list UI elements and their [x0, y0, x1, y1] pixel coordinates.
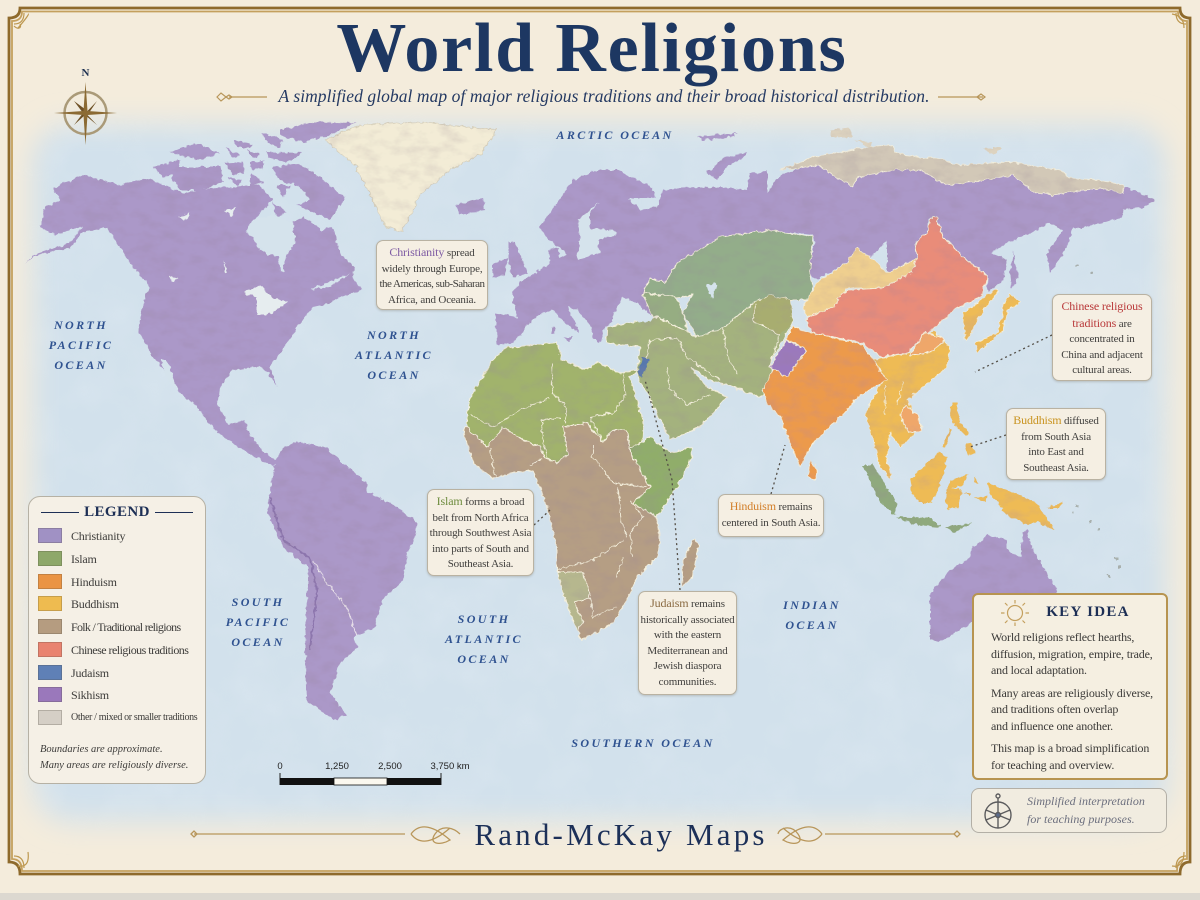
title: World Religions [336, 10, 848, 87]
scale bar [280, 773, 442, 786]
scale label 2,500: 2,500 [378, 761, 402, 772]
legend swatch: Chinese [38, 642, 62, 657]
region: Folk and traditional [463, 423, 699, 640]
legend swatch: Judaism [38, 665, 62, 680]
region: Judaism [638, 358, 650, 378]
legend note: Many areas are religiously diverse. [40, 760, 188, 771]
callout: Islam: through Southwest Asia [430, 527, 531, 539]
panel: teaching note [971, 788, 1167, 833]
key idea heading: KEY IDEA [1046, 604, 1130, 620]
callout: Islam: Southeast Asia. [448, 558, 513, 570]
legend swatch: Christianity [38, 528, 62, 543]
icon: sun [1001, 600, 1029, 626]
ocean label: North Atlantic: ATLANTIC [355, 348, 433, 362]
callout: Christianity: the Americas, sub-Saharan [379, 278, 485, 290]
ocean label: North Pacific: NORTH [54, 318, 108, 332]
callout: Judaism: Judaism remains [650, 596, 725, 610]
ocean label: Arctic: ARCTIC OCEAN [556, 128, 674, 142]
ocean label: North Pacific: PACIFIC [49, 338, 113, 352]
scale label 1,250: 1,250 [325, 761, 349, 772]
Andes and borders on South America [270, 497, 317, 650]
legend note [40, 744, 188, 771]
legend label: Buddhism: Buddhism [71, 597, 119, 611]
legend label: Folk: Folk / Traditional religions [71, 620, 180, 634]
ocean label: Southern: SOUTHERN OCEAN [571, 736, 715, 750]
ocean label: Indian [783, 598, 841, 632]
Australia [930, 530, 1060, 642]
ocean label: North Atlantic: NORTH [367, 328, 421, 342]
legend swatch: Buddhism [38, 596, 62, 611]
subtitle: A simplified global map of major religious traditions and their broad historical distribution. [278, 86, 930, 106]
teaching note text: Simplified interpretation [1027, 794, 1145, 808]
lakes and inland seas [160, 202, 717, 390]
legend swatch: Sikhism [38, 687, 62, 702]
ocean label: South Pacific [226, 595, 290, 649]
legend note: Boundaries are approximate. [40, 744, 163, 755]
callout: Buddhism: into East and [1028, 446, 1084, 458]
legend swatch: Other [38, 710, 62, 725]
ocean label: North Atlantic: OCEAN [367, 368, 421, 382]
region: Sikhism [770, 340, 807, 377]
callout: Chinese religious traditions [1052, 294, 1152, 381]
legend label: Sikhism: Sikhism [71, 688, 109, 702]
callout: Chinese religious traditions: Chinese religious [1061, 299, 1143, 313]
callout: Christianity: Africa, and Oceania. [388, 294, 476, 306]
region: Islam [467, 230, 972, 532]
legend label: Christianity: Christianity [71, 529, 125, 543]
legend label: Judaism: Judaism [71, 666, 109, 680]
key idea text: for teaching and overview. [991, 758, 1114, 772]
panel: key idea [972, 593, 1168, 780]
callout: Chinese religious traditions: China and adjacent [1061, 348, 1143, 360]
callout: Judaism: historically associated [640, 614, 734, 626]
subtitle ornaments [216, 92, 986, 102]
ocean label: South Atlantic: SOUTH [458, 612, 510, 626]
ocean label: South Atlantic [444, 612, 523, 666]
icon: compass rose: N [82, 67, 90, 79]
callout: Chinese religious traditions: traditions are [1072, 316, 1132, 330]
legend label: Islam: Islam [71, 552, 97, 566]
legend label: Other: Other / mixed or smaller traditions [71, 712, 197, 723]
scale label 0: 0 [277, 761, 283, 772]
callout: Judaism: Jewish diaspora [654, 660, 721, 672]
key idea text: and traditions often overlap [991, 702, 1118, 716]
region: Christianity [25, 122, 1155, 720]
leader lines [534, 335, 1052, 590]
Pacific islands [1072, 265, 1121, 577]
scale label 3,750 km: 3,750 km [430, 761, 470, 772]
North America [25, 175, 363, 460]
icon: compass wheel [984, 793, 1012, 829]
panel: legend [28, 496, 206, 784]
callout: Judaism: Mediterranean and [647, 644, 728, 656]
South America [250, 442, 417, 720]
ocean label: South Pacific: OCEAN [231, 635, 285, 649]
key idea text: and influence one another. This map is a broad simplification [991, 718, 1149, 755]
callout: Buddhism: Buddhism diffused [1013, 413, 1099, 427]
ocean label: North Pacific [48, 318, 113, 372]
legend heading: LEGEND [84, 504, 150, 520]
teaching note text: for teaching purposes. [1027, 812, 1135, 826]
callout: Christianity: Christianity spread [389, 245, 475, 259]
key idea text: and local adaptation. Many areas are religiously diverse, [991, 663, 1153, 700]
ocean label: South Atlantic: ATLANTIC [445, 632, 523, 646]
callout: Buddhism [1006, 408, 1106, 480]
key idea text: diffusion, migration, empire, trade, [991, 646, 1153, 660]
legend heading [41, 502, 193, 522]
publisher name: Rand-McKay Maps [474, 817, 768, 852]
callout: Islam [427, 489, 534, 576]
callout: Christianity: widely through Europe, [382, 262, 482, 274]
key idea text: World religions reflect hearths, [991, 630, 1134, 644]
ocean label: Indian: OCEAN [785, 618, 839, 632]
callout: Islam: into parts of South and [432, 542, 529, 554]
ocean label: Indian: INDIAN [783, 598, 841, 612]
Arctic islands [153, 122, 355, 220]
callout: Buddhism: Southeast Asia. [1023, 462, 1089, 474]
teaching note text [1027, 794, 1145, 826]
region: Hinduism [763, 327, 945, 480]
region: Chinese religious traditions [805, 217, 988, 357]
legend swatch: Folk [38, 619, 62, 634]
Eurasia north [495, 165, 1155, 345]
callout: Chinese religious traditions: concentrated in [1069, 333, 1135, 345]
ocean label: South Atlantic: OCEAN [457, 652, 511, 666]
callout: Hinduism: Hinduism remains [730, 499, 812, 513]
ocean label: North Atlantic [354, 328, 433, 382]
callout: Hinduism: centered in South Asia. [722, 516, 820, 528]
callout: Islam: Islam forms a broad [437, 494, 524, 508]
ocean label: South Pacific: PACIFIC [226, 615, 290, 629]
legend label: Hinduism: Hinduism [71, 575, 117, 589]
legend swatch: Hinduism [38, 574, 62, 589]
region: Greenland and other traditions [325, 122, 1123, 232]
callout: Chinese religious traditions: cultural areas. [1072, 364, 1132, 376]
icon: compass rose [54, 67, 116, 145]
callout: Islam: belt from North Africa [432, 512, 528, 524]
callout: Christianity [376, 240, 488, 310]
region: Buddhism [803, 248, 1063, 530]
ocean label: South Pacific: SOUTH [232, 595, 284, 609]
callout: Judaism: with the eastern [654, 629, 721, 641]
callout: Judaism [638, 591, 737, 695]
callout: Judaism: communities. [659, 676, 716, 688]
ocean label: North Pacific: OCEAN [54, 358, 108, 372]
key idea text [991, 630, 1153, 772]
legend label: Chinese: Chinese religious traditions [71, 643, 188, 657]
callout: Buddhism: from South Asia [1021, 430, 1091, 442]
European islands [455, 133, 1018, 342]
legend swatch: Islam [38, 551, 62, 566]
callout: Hinduism [718, 494, 824, 537]
publisher ornaments [190, 826, 961, 844]
